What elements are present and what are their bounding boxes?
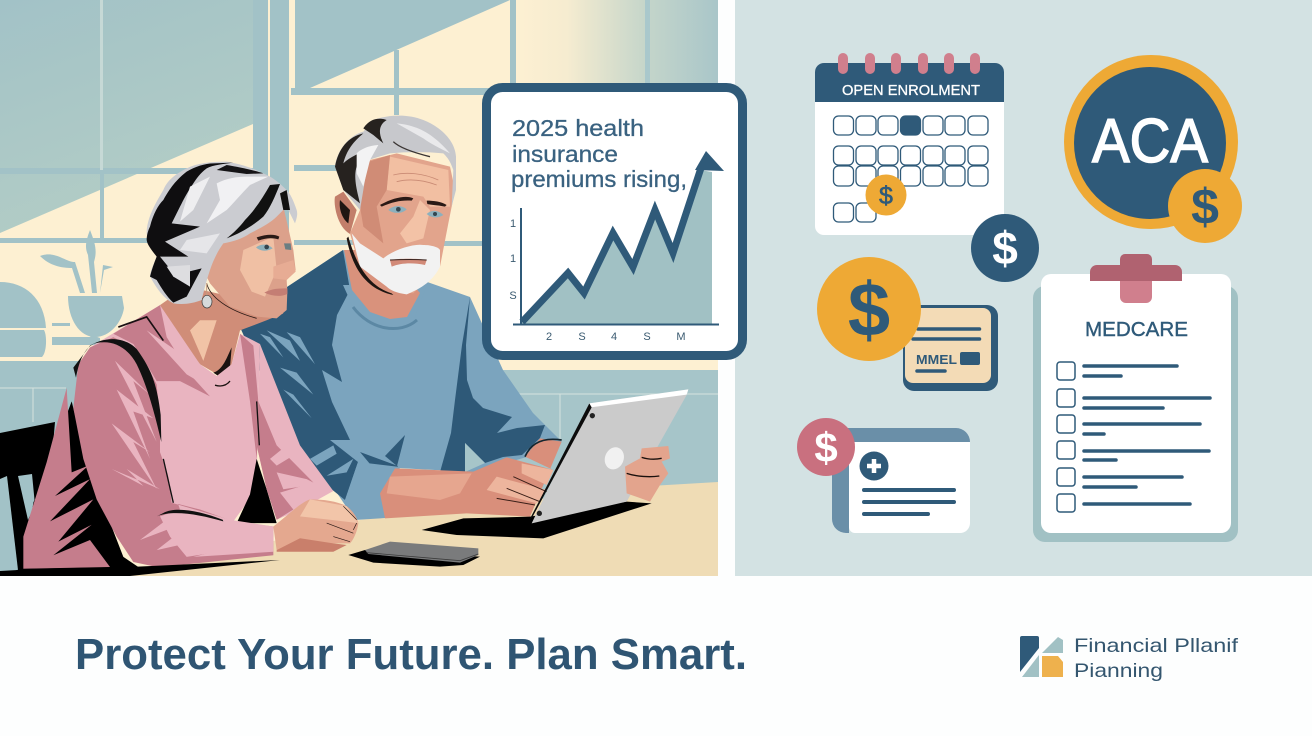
- clipboard clip: [1090, 254, 1182, 303]
- panel: couple illustration: [0, 0, 718, 576]
- checklist: [1057, 362, 1210, 512]
- chart axis labels: M: [676, 331, 686, 343]
- navy dollar coin: $: [992, 222, 1018, 274]
- ACA coin: $: [1191, 179, 1219, 235]
- chart heading: premiums rising,: [511, 166, 687, 192]
- chart heading: [511, 115, 687, 192]
- chart heading: insurance: [512, 141, 618, 167]
- medical record card: [797, 418, 970, 533]
- man shirt highlights: [260, 330, 353, 476]
- chart axes: [513, 208, 719, 325]
- smartphone: [348, 542, 480, 567]
- chart axis labels: 2: [546, 331, 552, 343]
- chart card: [486, 88, 742, 356]
- calendar: [815, 53, 1004, 235]
- sweater back panel: [23, 388, 110, 569]
- man neck: [344, 250, 420, 319]
- sweater right sleeve: [257, 344, 333, 520]
- logo text: [1074, 635, 1239, 682]
- calendar coin: $: [879, 182, 893, 210]
- tagline: Protect Your Future. Plan Smart.: [75, 630, 747, 679]
- tablet: [422, 389, 688, 538]
- chart axis labels: 1: [510, 253, 516, 265]
- man shirt shadows: [240, 250, 545, 500]
- woman neck: [160, 286, 283, 376]
- window background: [0, 0, 718, 576]
- orange dollar coin: $: [848, 268, 890, 353]
- man: [240, 116, 562, 520]
- ACA coin: [1168, 169, 1242, 243]
- pink coin: [797, 418, 855, 476]
- logo: [1020, 635, 1239, 682]
- sweater near arm: [73, 337, 273, 567]
- orange dollar coin: [817, 257, 921, 361]
- chart axis labels: S: [643, 331, 651, 343]
- payment card: MMEL: [916, 352, 957, 367]
- chair: [0, 422, 55, 576]
- Medicare clipboard: [1033, 254, 1238, 542]
- calendar coin: [866, 174, 906, 216]
- chart axis labels: S: [509, 290, 517, 302]
- tablet body: [532, 389, 688, 523]
- man forearm and hand: [380, 438, 562, 518]
- woman head: [147, 162, 297, 318]
- chart axis labels: 1: [510, 218, 516, 230]
- woman: [23, 162, 358, 570]
- man beard: [352, 233, 440, 294]
- calendar rings: [838, 53, 980, 74]
- logo mark: [1020, 636, 1063, 677]
- bottom shadow strip: [0, 560, 280, 576]
- ACA badge: ACA: [1092, 107, 1209, 176]
- calendar title: OPEN ENROLMENT: [842, 82, 980, 99]
- chart area: [522, 170, 712, 324]
- woman hair: [147, 162, 297, 304]
- plus icon: [860, 452, 888, 480]
- pink coin: $: [814, 424, 838, 471]
- chart arrow: [695, 151, 724, 171]
- man collar: [343, 285, 427, 335]
- man lower sleeve: [345, 462, 400, 518]
- chart axis labels: S: [578, 331, 586, 343]
- sweater torso: [90, 305, 260, 521]
- payment card: [903, 305, 998, 391]
- woman hand: [273, 499, 358, 550]
- calendar grid: [834, 116, 988, 222]
- chart trend line: [522, 168, 701, 322]
- chart axis labels: 4: [611, 331, 617, 343]
- man torso: [240, 250, 562, 520]
- panel: insurance icons background: [735, 0, 1312, 576]
- woman sweater: [23, 305, 358, 570]
- woman earring: [205, 283, 208, 295]
- table: [130, 482, 718, 576]
- chart axis labels: [509, 218, 686, 343]
- tablet shadow: [422, 502, 652, 538]
- man hair: [335, 116, 456, 210]
- ACA badge: [1064, 55, 1242, 243]
- chart heading: 2025 health: [512, 115, 644, 141]
- clipboard title: MEDCARE: [1085, 318, 1188, 341]
- logo text: Pianning: [1074, 660, 1163, 682]
- shelf with kettle, cup and plant: [0, 230, 124, 357]
- far hand fingers: [625, 446, 670, 502]
- man head: [335, 116, 456, 295]
- logo text: Financial Pllanif: [1074, 635, 1239, 657]
- navy dollar coin: [971, 214, 1039, 282]
